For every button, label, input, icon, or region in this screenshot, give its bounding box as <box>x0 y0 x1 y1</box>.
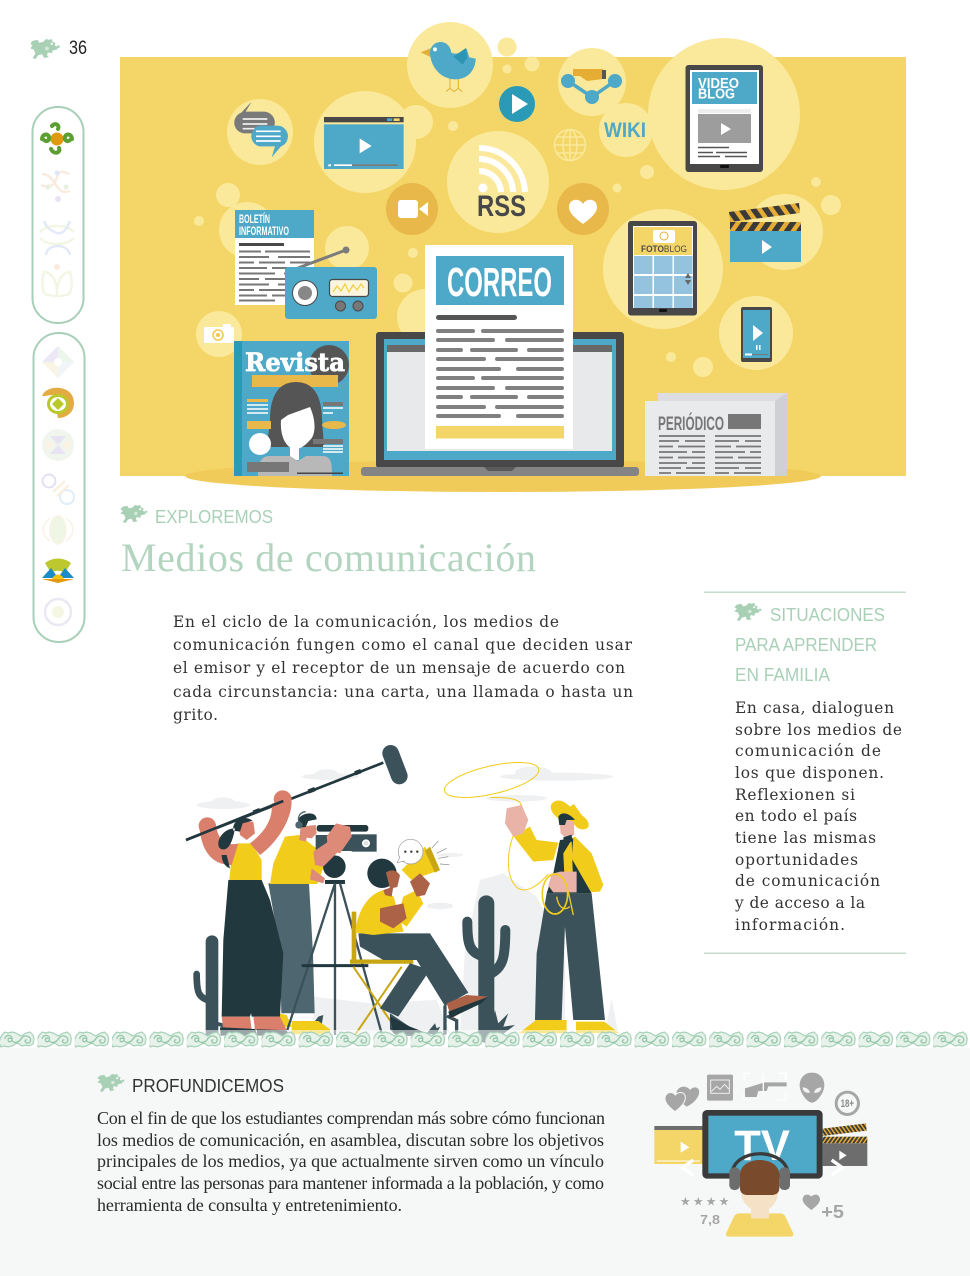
profundicemos paragraph: Con el fin de que los estudiantes comprendan más sobre cómo funcionan <box>97 1108 605 1128</box>
icon: pale sprout <box>42 264 72 296</box>
intro paragraph: grito. <box>173 706 218 724</box>
page number and frog mark <box>30 38 87 59</box>
icon: picture <box>707 1075 733 1101</box>
side panel: situaciones para aprender en familia: sobre los medios de <box>735 721 902 739</box>
section label: exploremos: EXPLOREMOS <box>155 507 273 527</box>
cowboy with lasso <box>441 755 619 1033</box>
side panel: situaciones para aprender en familia: en todo el país <box>735 807 857 825</box>
side panel: situaciones para aprender en familia: comunicación de <box>735 742 881 760</box>
icon: pale medallion <box>42 429 74 461</box>
desert plants <box>313 1010 515 1035</box>
icon: rss feed: RSS <box>477 190 526 223</box>
icon: colored fan <box>42 558 74 583</box>
tv viewer illustration <box>654 1073 867 1237</box>
side panel: situaciones para aprender en familia: y de acceso a la <box>734 894 865 912</box>
viewer with headphones <box>726 1154 793 1237</box>
icon: clapperboard <box>729 203 801 262</box>
intro paragraph: comunicación fungen como el canal que deciden usar <box>173 636 633 654</box>
right cactus <box>445 903 505 1035</box>
background clouds and rocks <box>197 767 618 1033</box>
icon: photo blog tablet: FOTOBLOG <box>641 244 687 255</box>
icon: pale round seal <box>45 599 71 625</box>
icon: gray clapperboard <box>823 1123 867 1175</box>
intro paragraph: En el ciclo de la comunicación, los medios de <box>173 613 559 631</box>
side panel: situaciones para aprender en familia: En casa, dialoguen <box>735 699 894 717</box>
rating stars: 7,8 <box>700 1213 720 1227</box>
decorative greca border <box>0 1030 970 1048</box>
hero banner: media illustration <box>120 22 906 492</box>
intro paragraph <box>173 613 633 724</box>
side panel: situaciones para aprender en familia: los que disponen. <box>735 764 884 782</box>
floor ellipse <box>185 460 821 492</box>
icon: rss feed <box>477 148 526 223</box>
bottom band: profundicemos background <box>0 1048 970 1276</box>
intro paragraph: cada circunstancia: una carta, una llamada o hasta un <box>173 683 633 701</box>
section label: exploremos <box>120 505 273 527</box>
icon: hearts <box>665 1087 699 1112</box>
camera operator body <box>268 812 330 1034</box>
icon: newsletter: INFORMATIVO <box>239 226 289 238</box>
icon: video blog tablet: VIDEO <box>698 76 739 92</box>
profundicemos paragraph <box>97 1108 605 1215</box>
rating stars <box>680 1194 729 1227</box>
main heading: Medios de comunicación <box>121 535 536 580</box>
rating stars: ★★★★ <box>680 1194 729 1208</box>
icon: revolver <box>744 1073 787 1100</box>
likes count <box>803 1195 844 1222</box>
side panel: situaciones para aprender en familia: SITUACIONES <box>770 605 885 625</box>
icon: active spiral flower <box>42 124 72 153</box>
left cactus <box>197 942 225 1035</box>
icon: age rating <box>835 1091 860 1116</box>
email document: CORREO <box>447 259 552 305</box>
pale bubbles <box>194 22 841 377</box>
tv monitor: TV <box>734 1122 791 1170</box>
icon: video blog tablet <box>686 65 763 172</box>
icon: newspaper <box>645 393 787 476</box>
sidebar pill: seven-stage icons <box>34 333 84 642</box>
seated woman with megaphone <box>355 839 488 1036</box>
icon: pale lotus <box>43 516 73 544</box>
side panel: situaciones para aprender en familia: información. <box>735 916 845 934</box>
icon: orange ring <box>42 388 74 418</box>
icon: pale diamond <box>42 346 74 378</box>
icon: twitter bird <box>421 42 476 92</box>
icon: video blog tablet: BLOG <box>698 86 735 102</box>
profundicemos paragraph: herramienta de consulta y entretenimiento. <box>97 1195 402 1215</box>
tv monitor <box>702 1110 823 1179</box>
icon: video player window <box>324 117 404 169</box>
icon: photo blog tablet <box>628 221 697 316</box>
boom operator woman <box>186 790 292 1036</box>
side panel: situaciones para aprender en familia: Reflexionen si <box>735 786 855 804</box>
likes count: +5 <box>821 1201 844 1222</box>
icon: pale knot <box>41 170 70 202</box>
icon: pale rings <box>42 474 74 504</box>
icon: magazine <box>234 341 349 476</box>
side panel: situaciones para aprender en familia: oportunidades <box>735 851 858 869</box>
icon: alien <box>800 1073 824 1103</box>
icon: radio <box>285 246 377 319</box>
icon: laptop <box>361 332 639 476</box>
icon: smartphone <box>741 307 772 362</box>
page number and frog mark: 36 <box>69 38 87 59</box>
side panel: situaciones para aprender en familia: tiene las mismas <box>735 829 876 847</box>
icon: magazine: Revista <box>245 348 345 377</box>
profundicemos paragraph: social entre las personas para mantener informada a la población, y como <box>97 1173 604 1193</box>
label: wiki: WIKI <box>604 119 646 142</box>
icon: newsletter <box>235 210 314 305</box>
icon: network with camera <box>561 69 622 104</box>
film crew illustration <box>186 753 619 1036</box>
sidebar pill: four-stage icons <box>32 107 84 323</box>
icon: chat bubbles <box>234 102 288 157</box>
icon: pale crossing arcs <box>40 221 74 255</box>
side panel: situaciones para aprender en familia: EN FAMILIA <box>735 665 830 685</box>
section label: profundicemos: PROFUNDICEMOS <box>132 1076 284 1096</box>
profundicemos paragraph: los medios de comunicación, en asamblea, discutan sobre los objetivos <box>97 1130 604 1150</box>
icon: age rating: 18+ <box>841 1098 854 1110</box>
side panel: situaciones para aprender en familia <box>704 592 906 954</box>
side panel: situaciones para aprender en familia: de comunicación <box>735 872 880 890</box>
boom microphone <box>186 753 399 840</box>
icon: yellow video window <box>654 1126 703 1175</box>
side panel: situaciones para aprender en familia: PARA APRENDER <box>735 635 877 655</box>
profundicemos paragraph: principales de los medios, ya que actualmente sirven como un vínculo <box>97 1151 604 1171</box>
icon: heart <box>557 183 609 235</box>
icon: newsletter: BOLETÍN <box>239 213 270 226</box>
icon: newspaper: PERIÓDICO <box>658 413 724 435</box>
email document <box>425 245 573 449</box>
icon: camera <box>204 324 234 343</box>
video camera on tripod <box>287 825 382 1035</box>
icon: play button <box>499 86 535 122</box>
icon: globe <box>554 130 586 160</box>
icon: video camera <box>386 183 438 235</box>
director chair <box>350 912 413 1035</box>
intro paragraph: el emisor y el receptor de un mensaje de acuerdo con <box>173 659 625 677</box>
camera operator arm and hand <box>310 823 352 883</box>
